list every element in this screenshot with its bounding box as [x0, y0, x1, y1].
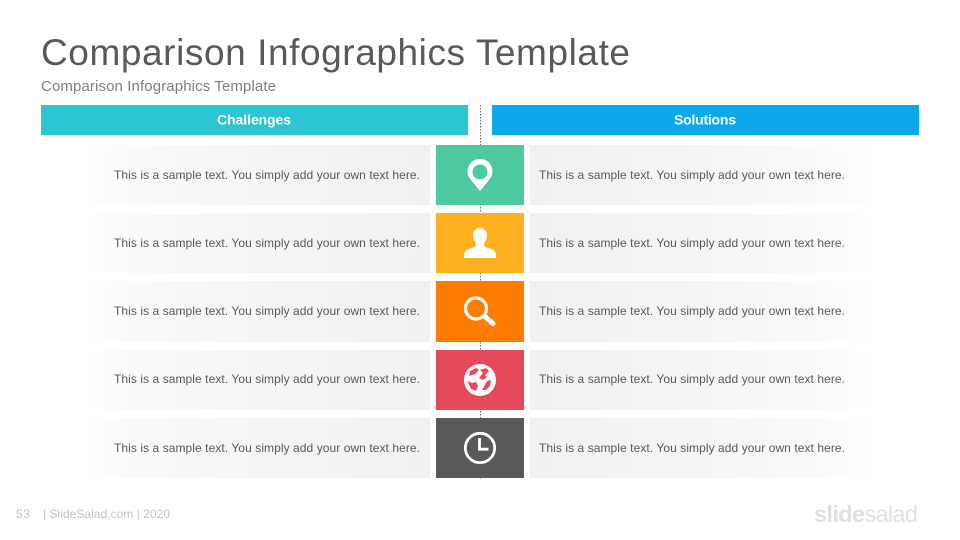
logo wordmark: slidesalad [814, 501, 918, 527]
icon tile: magnifier [436, 281, 524, 342]
solution text panel 1 [530, 145, 875, 205]
solution text panel 4: This is a sample text. You simply add your own text here. [539, 372, 845, 386]
solution text panel 3: This is a sample text. You simply add your own text here. [539, 304, 845, 318]
challenge text panel 4 [85, 350, 430, 410]
row 4 [85, 350, 875, 410]
center dotted line [480, 105, 482, 480]
challenge text panel 2: This is a sample text. You simply add your own text here. [114, 236, 420, 250]
icon tile: location pin [436, 145, 524, 205]
row 1 [85, 145, 875, 205]
icon tile: globe [436, 350, 524, 410]
icon tile: person [436, 213, 524, 273]
solution text panel 5 [530, 418, 875, 478]
row 3 [85, 281, 875, 342]
solution text panel 3 [530, 281, 875, 342]
header: Solutions [492, 105, 919, 135]
header: Solutions: Solutions [674, 112, 736, 128]
row 2 [85, 213, 875, 273]
solution text panel 4 [530, 350, 875, 410]
row 5 [85, 418, 875, 478]
challenge text panel 3 [85, 281, 430, 342]
challenge text panel 3: This is a sample text. You simply add your own text here. [114, 304, 420, 318]
challenge text panel 2 [85, 213, 430, 273]
solution text panel 2: This is a sample text. You simply add your own text here. [539, 236, 845, 250]
title: Comparison Infographics Template [41, 32, 630, 73]
icon tile: clock [436, 418, 524, 478]
solution text panel 1: This is a sample text. You simply add your own text here. [539, 168, 845, 182]
challenge text panel 1: This is a sample text. You simply add your own text here. [114, 168, 420, 182]
subtitle: Comparison Infographics Template [41, 78, 276, 95]
challenge text panel 4: This is a sample text. You simply add your own text here. [114, 372, 420, 386]
challenge text panel 5: This is a sample text. You simply add your own text here. [114, 441, 420, 455]
challenge text panel 5 [85, 418, 430, 478]
solution text panel 5: This is a sample text. You simply add your own text here. [539, 441, 845, 455]
header: Challenges [41, 105, 468, 135]
solution text panel 2 [530, 213, 875, 273]
challenge text panel 1 [85, 145, 430, 205]
header: Challenges: Challenges [217, 112, 291, 128]
footer page number: 53 [16, 507, 30, 521]
footer credit: | SlideSalad.com | 2020 [43, 507, 170, 521]
